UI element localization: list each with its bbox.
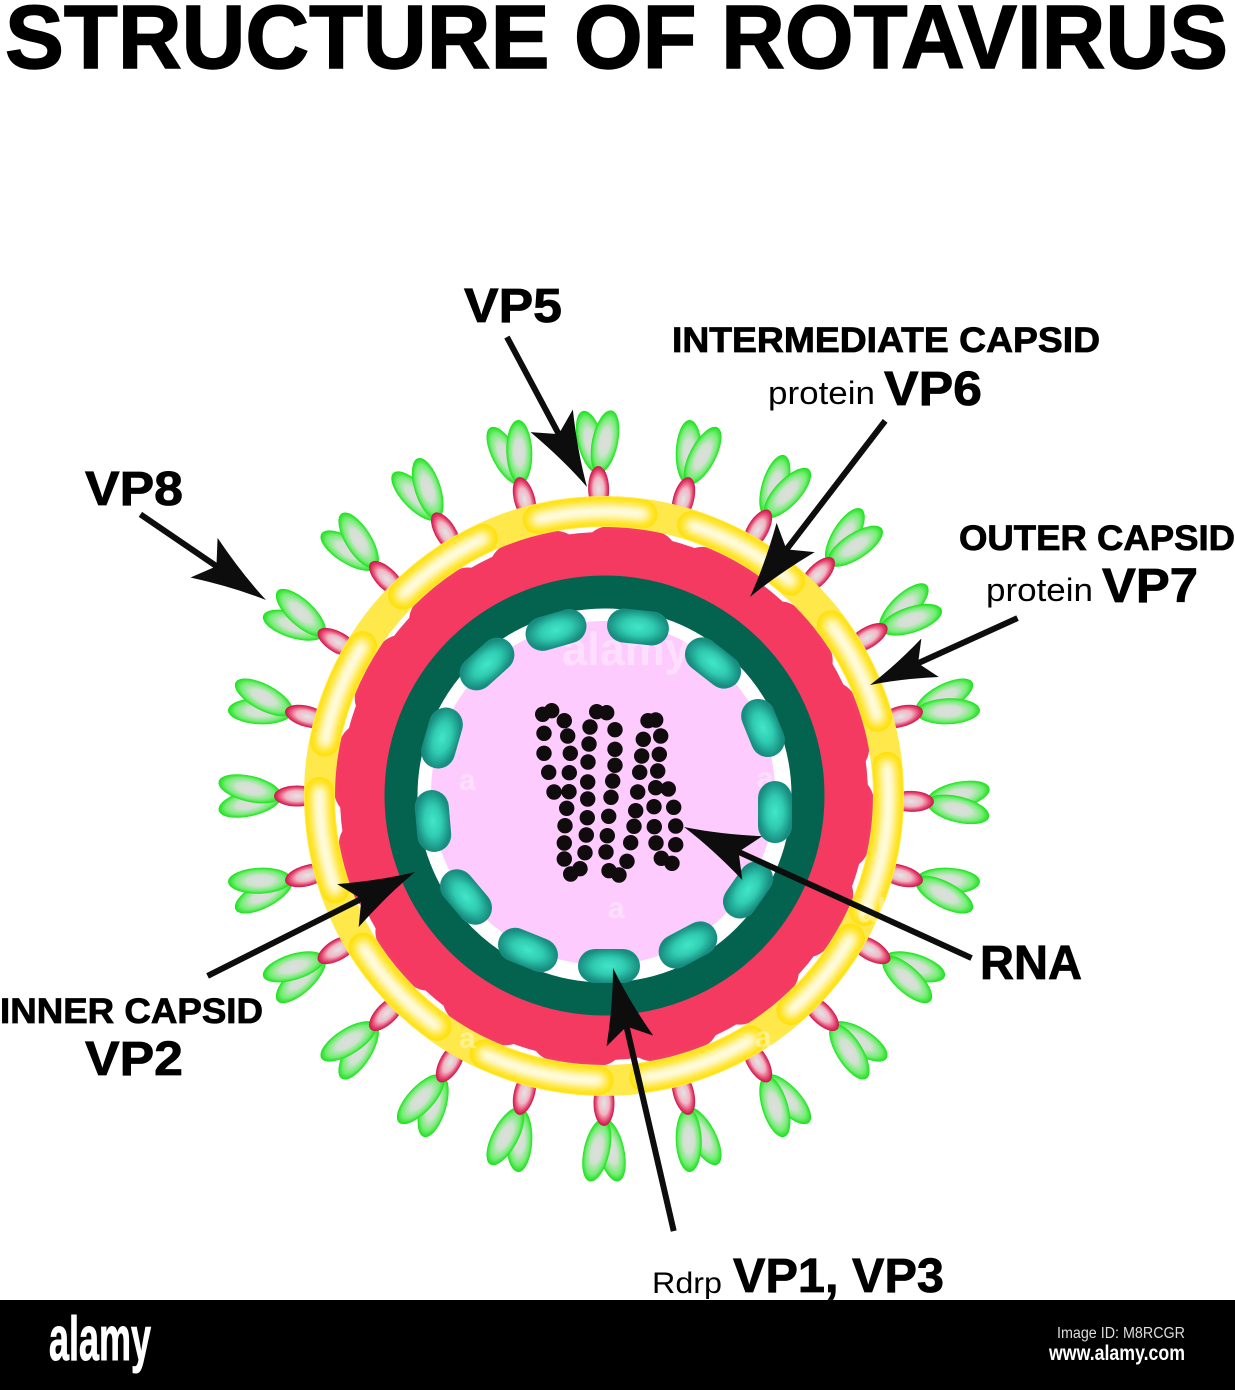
arrow: VP1 VP3 — [590, 963, 697, 1236]
label: outer capsid protein VP7: OUTER CAPSID — [959, 519, 1235, 558]
label: intermediate capsid protein VP6: VP6 — [884, 363, 982, 416]
watermark — [459, 623, 886, 1055]
watermark: a — [757, 762, 774, 795]
core — [431, 621, 775, 965]
label: Rdrp VP1, VP3: Rdrp — [652, 1267, 722, 1300]
watermark: a — [755, 1021, 772, 1054]
watermark: alamy — [562, 623, 690, 675]
arrow: RNA — [674, 805, 982, 980]
website: www.alamy.com — [1048, 1342, 1185, 1365]
label: outer capsid protein VP7: protein — [986, 572, 1093, 608]
label: intermediate capsid protein VP6 — [672, 321, 1100, 416]
surface spikes VP5 and VP8 — [216, 407, 993, 1184]
label: inner capsid VP2: INNER CAPSID — [0, 992, 263, 1031]
watermark: al — [858, 892, 886, 930]
arrow: VP5 — [486, 326, 608, 498]
arrow: VP6 — [731, 406, 904, 612]
arrow: VP7 — [861, 599, 1026, 704]
image id: Image ID: M8RCGR — [1057, 1325, 1185, 1342]
footer logo: alamy — [49, 1305, 151, 1374]
intermediate capsid ring VP6 — [340, 532, 868, 1060]
inner capsid ring VP2 — [401, 592, 808, 999]
label: Rdrp VP1, VP3: VP1, VP3 — [733, 1250, 944, 1303]
label: inner capsid VP2: VP2 — [85, 1033, 183, 1086]
RNA strand — [543, 711, 676, 875]
label: outer capsid protein VP7 — [959, 519, 1235, 613]
label: intermediate capsid protein VP6: INTERMEDIATE CAPSID — [672, 321, 1100, 360]
label: inner capsid VP2 — [0, 992, 263, 1086]
label: RNA: RNA — [980, 937, 1082, 990]
arrow: VP8 — [127, 495, 280, 620]
RdRp capsules VP1 VP3 — [413, 605, 792, 983]
watermark: a — [608, 892, 625, 925]
watermark: a — [459, 1022, 476, 1055]
label: intermediate capsid protein VP6: protein — [768, 375, 875, 411]
arrow: VP2 — [197, 851, 426, 997]
footer bar — [0, 1300, 1235, 1390]
virus diagram — [216, 407, 993, 1184]
label: VP8: VP8 — [85, 463, 183, 516]
outer capsid ring VP7 — [246, 438, 962, 1154]
label: VP5: VP5 — [464, 280, 562, 333]
watermark: a — [459, 764, 476, 797]
label: outer capsid protein VP7: VP7 — [1102, 560, 1198, 613]
